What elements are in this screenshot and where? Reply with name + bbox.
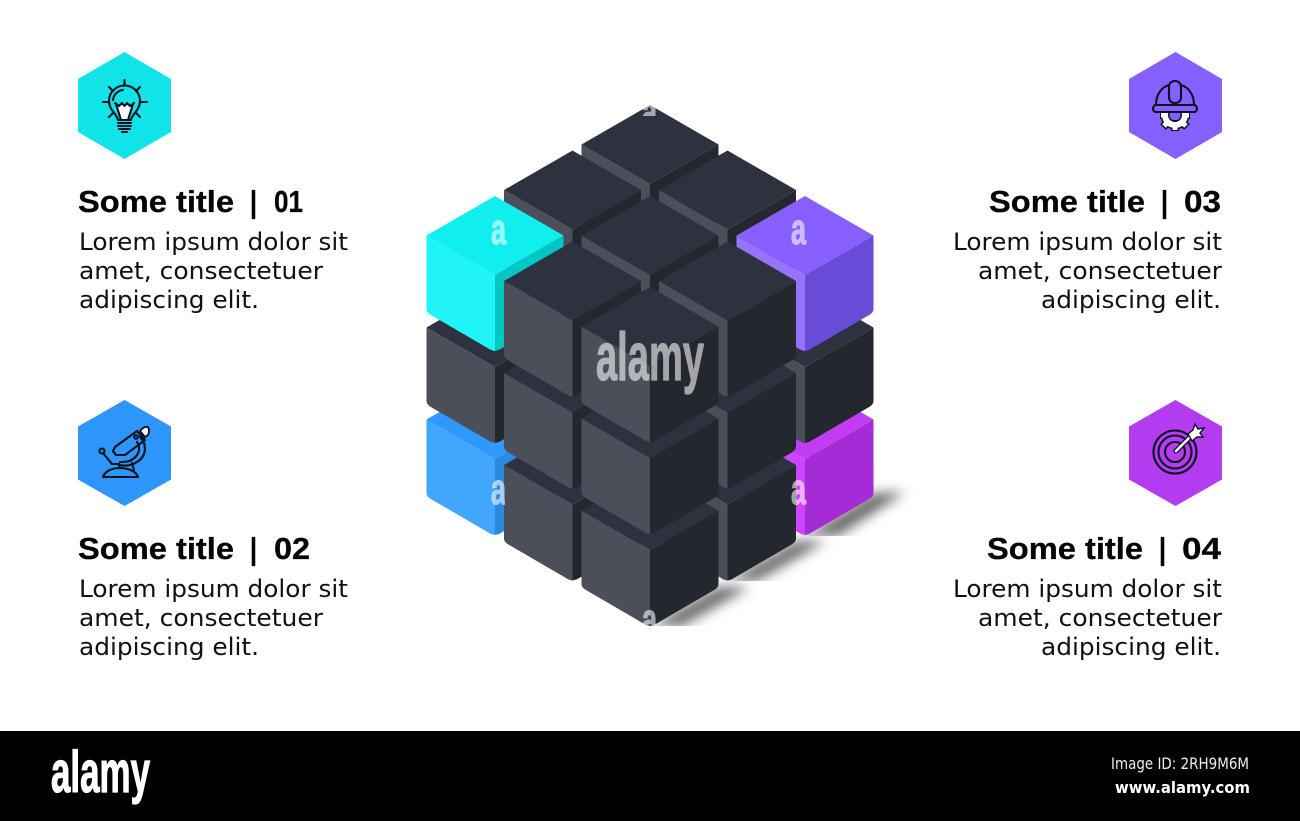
hexagon: magenta with target icon (1129, 400, 1222, 506)
watermark over cube: a (642, 595, 657, 644)
title 04 (987, 531, 1222, 566)
text 03: amet, consectetuer (978, 257, 1222, 285)
panel: step 01 (78, 52, 348, 314)
title 04: | (1159, 531, 1166, 566)
website: www.alamy.com (1115, 778, 1250, 797)
cube: magenta corner (736, 380, 874, 535)
text 01: Lorem ipsum dolor sit (79, 228, 348, 256)
title 01: | (250, 184, 257, 219)
watermark over cube: a (791, 465, 806, 514)
title 02: | (250, 531, 257, 566)
text 03 (953, 228, 1222, 314)
cube: purple corner (736, 196, 874, 351)
title 03 (989, 184, 1221, 219)
text 03: Lorem ipsum dolor sit (953, 228, 1222, 256)
text 02: Lorem ipsum dolor sit (79, 575, 348, 603)
title 03: | (1161, 184, 1168, 219)
hexagon: purple with helmet and gear icon (1129, 52, 1222, 159)
footer logo: alamy (51, 740, 150, 805)
footer bar (0, 731, 1300, 821)
text 04: Lorem ipsum dolor sit (953, 575, 1222, 603)
text 04: adipiscing elit. (1041, 633, 1221, 661)
watermark over cube: a (642, 87, 657, 136)
text 01 (79, 228, 348, 314)
panel: step 04 (953, 400, 1222, 661)
hexagon: blue with microscope icon (78, 400, 171, 506)
title 02: Some title (78, 531, 234, 566)
text 02 (79, 575, 348, 661)
title 01: Some title (78, 184, 234, 219)
panel: step 02 (78, 400, 348, 661)
panel: step 03 (953, 52, 1222, 314)
middle layer of cubes (426, 197, 874, 534)
title 01 (78, 184, 303, 219)
isometric cube (426, 105, 874, 626)
text 04 (953, 575, 1222, 661)
watermark over cube: a (791, 205, 806, 254)
cube: cyan corner (426, 196, 564, 351)
title 04: Some title (987, 531, 1143, 566)
title 04: 04 (1182, 531, 1222, 566)
title 03: 03 (1184, 184, 1221, 219)
watermark over cube: a (491, 205, 506, 254)
title 01: 01 (274, 184, 303, 219)
cube: blue corner (426, 380, 564, 535)
text 03: adipiscing elit. (1041, 286, 1221, 314)
watermark over cube: a (491, 465, 506, 514)
text 02: amet, consectetuer (79, 604, 323, 632)
title 02 (78, 531, 310, 566)
watermark over cube: alamy (596, 319, 704, 395)
text 02: adipiscing elit. (79, 633, 259, 661)
cube shadow (650, 492, 905, 626)
watermark over cube (491, 87, 806, 644)
bottom layer of cubes (426, 289, 874, 626)
text 04: amet, consectetuer (978, 604, 1222, 632)
image id: Image ID: 2RH9M6M (1111, 754, 1249, 773)
title 03: Some title (989, 184, 1145, 219)
text 01: amet, consectetuer (79, 257, 323, 285)
title 02: 02 (274, 531, 310, 566)
text 01: adipiscing elit. (79, 286, 259, 314)
hexagon: cyan with lightbulb icon (78, 52, 171, 159)
top layer of cubes (426, 105, 874, 442)
